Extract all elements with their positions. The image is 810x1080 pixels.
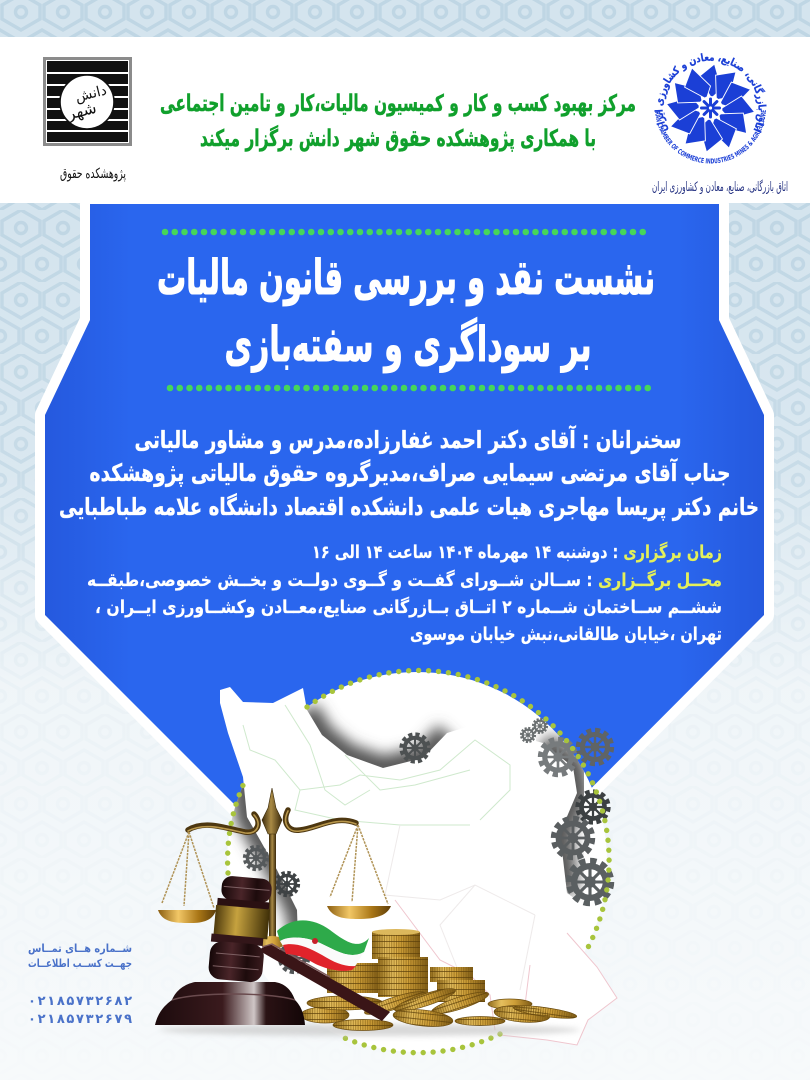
event time and place text: ششــم ســاختمان شــماره ۲ اتــاق بــازرگانی صنایع،معــادن وکشــاورزی ایــران ،	[95, 596, 722, 618]
contact text: جهــت کســب اطلاعــات	[28, 957, 132, 970]
logo: Shahr-e Danesh law institute: پژوهشکده حقوق	[60, 166, 126, 182]
blue panel	[45, 204, 764, 975]
header text	[160, 91, 636, 152]
logo: Iran chamber of commerce: IRAN CHAMBER OF COMMERCE INDUSTRIES MINES & AGRICULTURE	[655, 110, 766, 164]
logo: Shahr-e Danesh law institute: دانش	[74, 83, 108, 106]
top dotted divider	[165, 229, 646, 235]
coin stacks	[301, 929, 577, 1030]
contact text: ۰۲۱۸۵۷۳۲۶۸۲	[28, 994, 132, 1009]
logo: Iran chamber of commerce	[652, 53, 788, 195]
event time and place text	[87, 541, 722, 645]
logo: Shahr-e Danesh law institute: شهر	[64, 98, 99, 125]
dotted circle arcs	[228, 670, 609, 1053]
header text: با همکاری پژوهشکده حقوق شهر دانش برگزار میکند	[200, 125, 596, 152]
event time and place text: تهران ،خیابان طالقانی،نبش خیابان موسوی	[410, 624, 722, 645]
event time and place text: زمان برگزاری : دوشنبه ۱۴ مهرماه ۱۴۰۴ ساعت ۱۴ الی ۱۶	[312, 541, 722, 563]
gears	[245, 719, 611, 972]
contact text: ۰۲۱۸۵۷۳۲۶۷۹	[28, 1012, 132, 1027]
logo: Shahr-e Danesh law institute	[43, 57, 132, 182]
Iranian flag ribbon	[277, 920, 369, 971]
illustration: map of Iran	[220, 687, 617, 1045]
event time and place text: محــل برگــزاری : ســالن شــورای گفــت و گــوی دولــت و بخــش خصوصی،طبقــه	[87, 569, 722, 591]
contact text: شــماره هــای تمــاس	[28, 942, 132, 955]
balance scales	[158, 788, 391, 949]
title	[157, 250, 655, 373]
bottom dotted divider	[170, 385, 648, 391]
title: بر سوداگری و سفته‌بازی	[224, 317, 592, 373]
ground shadow	[160, 1024, 580, 1036]
gavel	[155, 875, 390, 1025]
logo: Iran chamber of commerce: اتاق بازرگانی، صنایع، معادن و کشاورزی ایران	[654, 53, 767, 134]
speakers text	[59, 425, 759, 521]
illustration: circle behind the map	[227, 672, 607, 1052]
contact text	[28, 942, 132, 1027]
header band	[0, 37, 810, 203]
